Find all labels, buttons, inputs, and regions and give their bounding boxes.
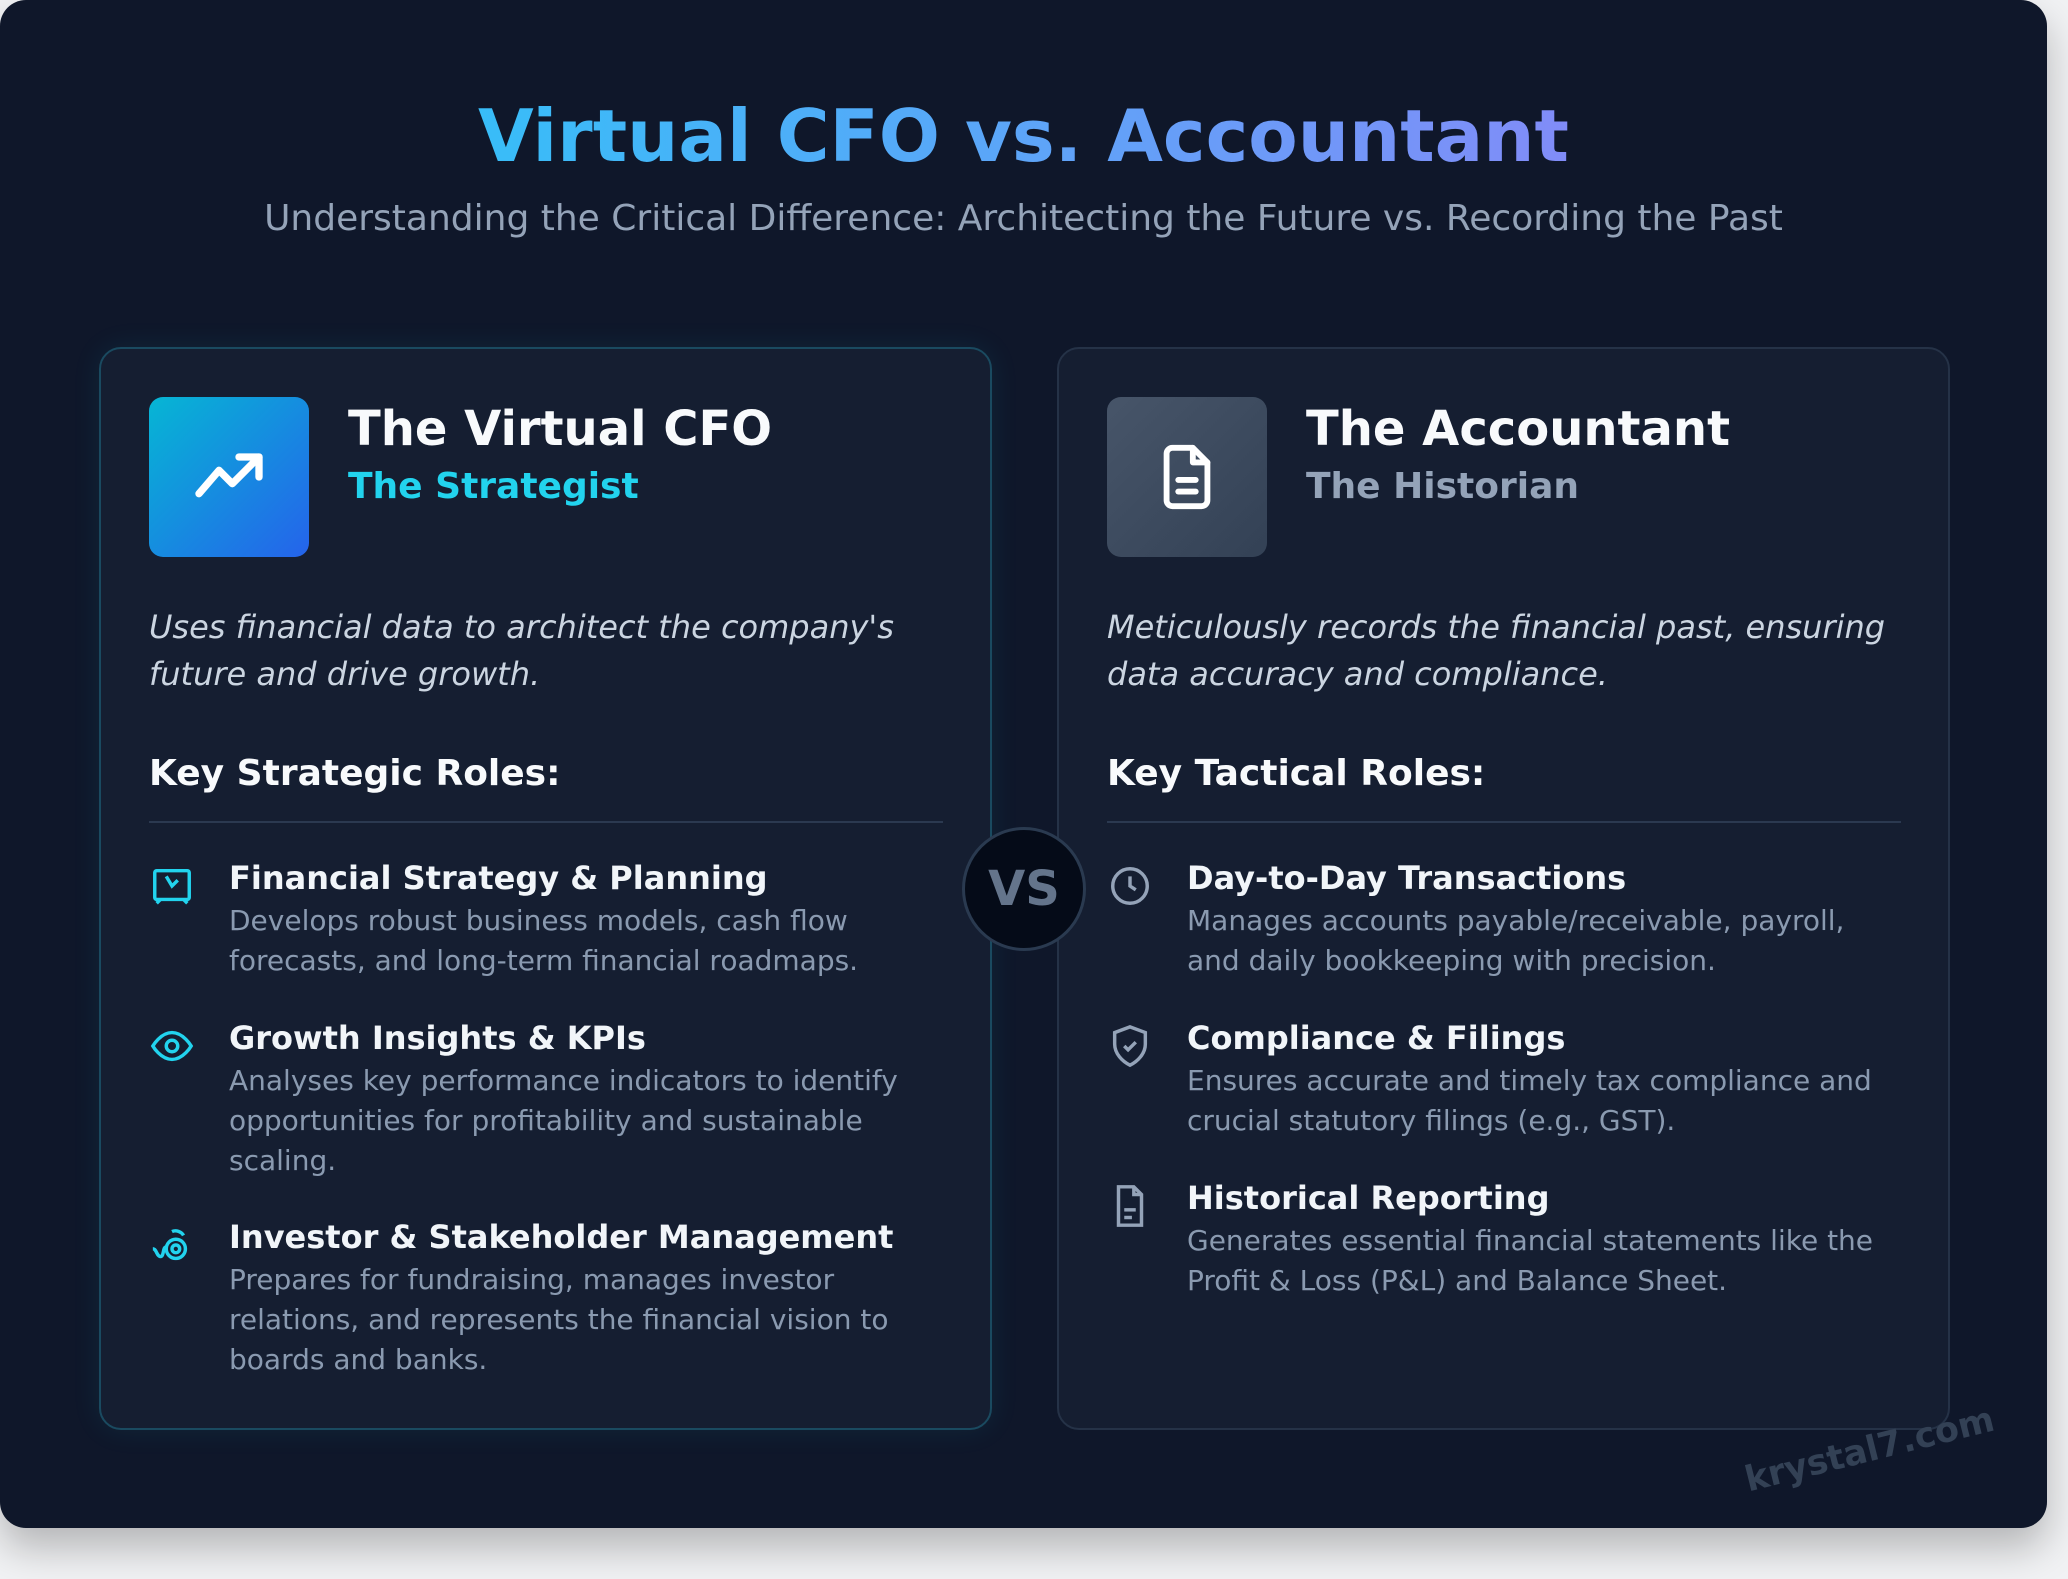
subheading: The Strategist <box>348 466 639 507</box>
subheading: The Historian <box>1306 466 1579 507</box>
panel: virtual cfo: Investor & Stakeholder Management <box>229 1218 893 1256</box>
item: investor management <box>152 1218 893 1376</box>
description: Uses financial data to architect the company's future and drive growth. <box>149 608 894 693</box>
vs badge <box>962 827 1086 951</box>
item: transactions <box>1111 859 1844 977</box>
panel: virtual cfo: Prepares for fundraising, manages investor relations, and represents the financial vision to boards and banks. <box>229 1263 888 1376</box>
panel: accountant: Compliance & Filings <box>1187 1019 1565 1057</box>
subtitle: Understanding the Critical Difference: Architecting the Future vs. Recording the Past <box>264 198 1783 239</box>
item: growth insights <box>150 1019 898 1177</box>
panel: virtual cfo: Financial Strategy & Planning <box>229 859 768 897</box>
panel: virtual cfo: Analyses key performance indicators to identify opportunities for profitability and sustainable scaling. <box>229 1064 898 1177</box>
watermark: krystal7.com <box>1741 1400 1998 1500</box>
icon: planning <box>153 869 191 904</box>
item: reporting <box>1116 1179 1873 1297</box>
title: Virtual CFO vs. Accountant <box>478 94 1569 178</box>
icon: clock <box>1111 867 1149 905</box>
panel: virtual cfo: Growth Insights & KPIs <box>229 1019 646 1057</box>
panel: accountant: Historical Reporting <box>1187 1179 1549 1217</box>
item: compliance <box>1112 1019 1872 1137</box>
heading: The Accountant <box>1306 401 1730 457</box>
panel: virtual cfo: Develops robust business models, cash flow forecasts, and long-term financial roadmaps. <box>229 904 858 977</box>
panel: virtual cfo <box>99 347 992 1430</box>
icon: handshake <box>152 1229 188 1260</box>
item: financial strategy <box>153 859 858 977</box>
roles heading: Key Tactical Roles: <box>1107 753 1485 794</box>
roles heading: Key Strategic Roles: <box>149 753 561 794</box>
icon: trending up <box>149 397 309 557</box>
vs badge: VS <box>988 861 1060 917</box>
panel: accountant: Ensures accurate and timely tax compliance and crucial statutory filings (e.g., GST). <box>1187 1064 1872 1137</box>
icon: file <box>1116 1185 1144 1227</box>
heading: The Virtual CFO <box>348 401 772 457</box>
panel: accountant: Day-to-Day Transactions <box>1187 859 1626 897</box>
icon: document <box>1107 397 1267 557</box>
panel: accountant <box>1057 347 1950 1430</box>
description: Meticulously records the financial past, ensuring data accuracy and compliance. <box>1107 608 1885 693</box>
panel: accountant: Generates essential financial statements like the Profit & Loss (P&L) and Balance Sheet. <box>1187 1224 1873 1297</box>
icon: shield <box>1112 1025 1148 1068</box>
icon: eye <box>150 1030 194 1062</box>
panel: accountant: Manages accounts payable/receivable, payroll, and daily bookkeeping with precision. <box>1187 904 1844 977</box>
